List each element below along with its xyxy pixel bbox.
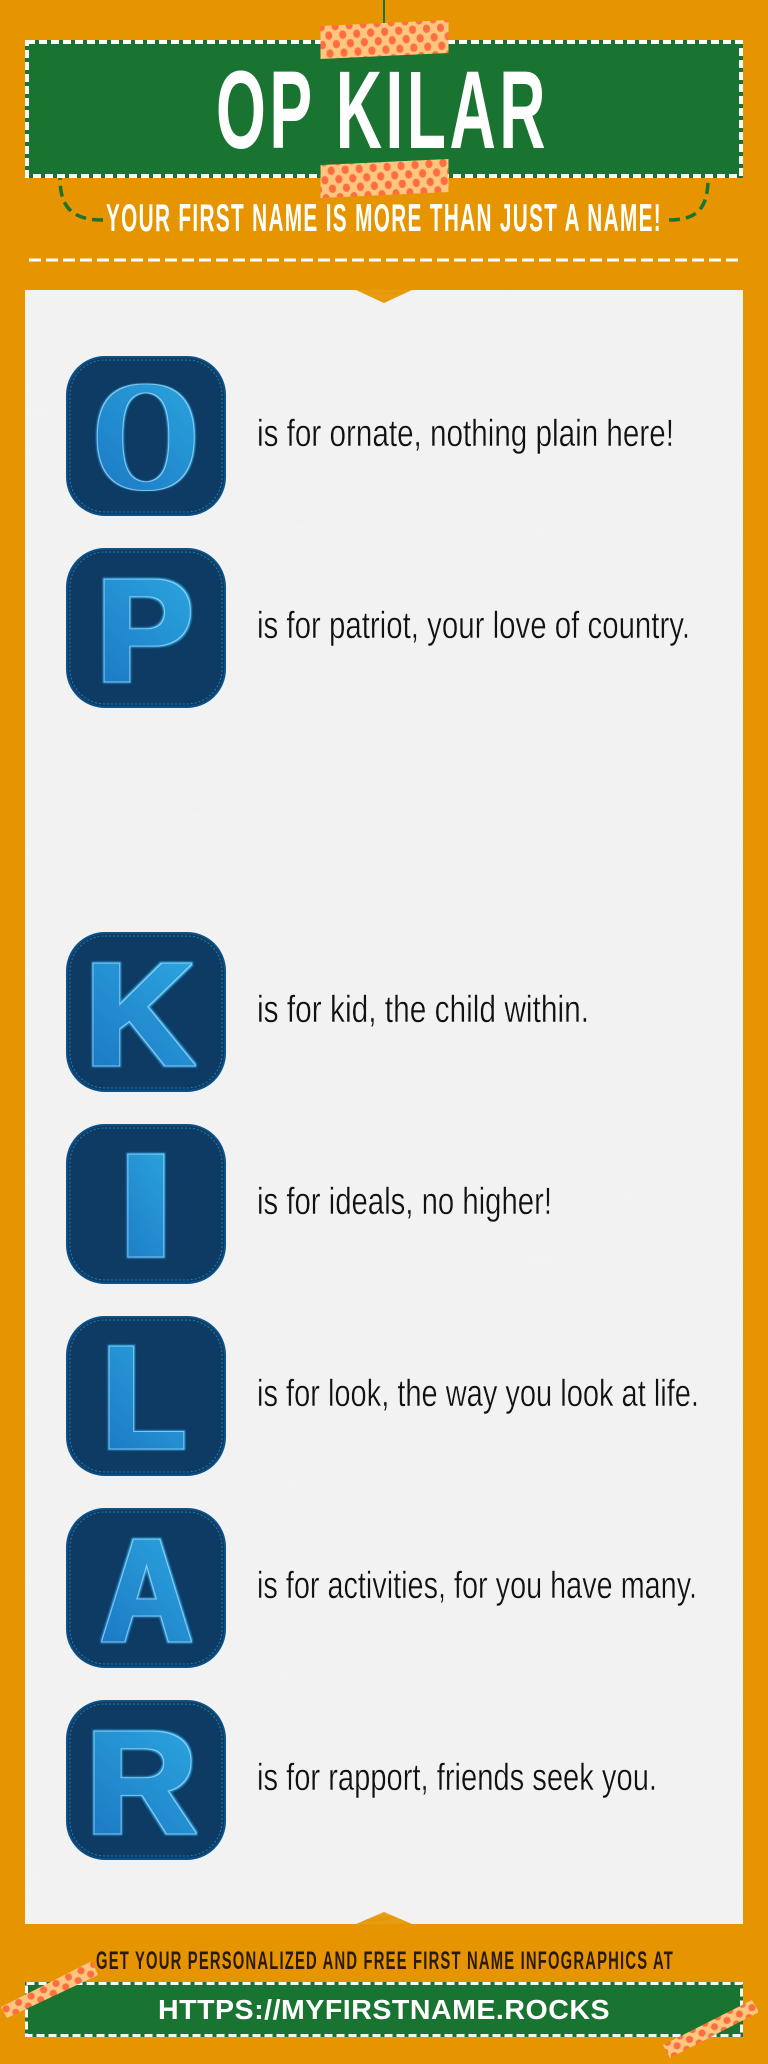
row: R [67,1700,657,1866]
row: P [67,548,690,714]
letter K: K [85,932,194,1098]
curved connector left [60,178,103,220]
footer banner [25,1982,743,2037]
row: K [67,932,589,1098]
letter A: A [101,1508,192,1674]
tape: top [320,20,448,59]
row: L [67,1316,699,1480]
letter I: I [116,1124,176,1288]
title banner [25,40,743,178]
tape: footer right [663,2000,759,2058]
letter O: O [92,348,200,522]
letter R: R [86,1700,197,1866]
row: A [67,1508,697,1674]
letter L: L [102,1316,186,1480]
letter P: P [97,548,193,714]
footer url: HTTPS://MYFIRSTNAME.ROCKS [158,1994,610,2025]
tape: footer left [1,1961,98,2018]
curved connector right [669,178,708,220]
row: I [67,1124,552,1288]
text R: is for rapport, friends seek you. [257,1757,657,1799]
text K: is for kid, the child within. [257,989,589,1031]
top hanging string [383,0,385,23]
tape: bottom of title [320,159,448,198]
text I: is for ideals, no higher! [257,1181,552,1223]
row: O [67,348,674,522]
panel: letters [25,290,743,1924]
